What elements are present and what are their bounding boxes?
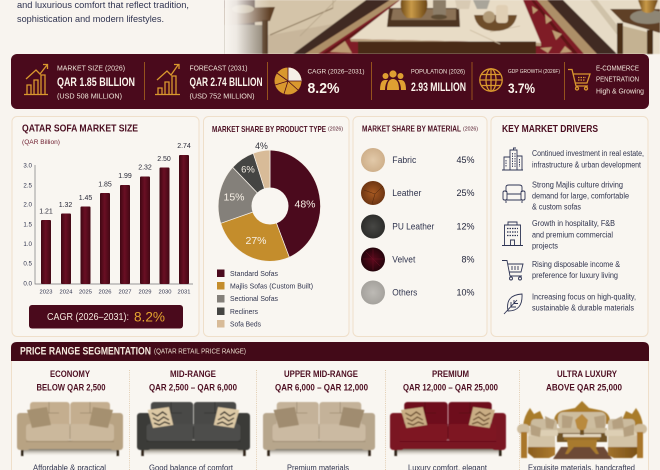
stat: forecast — [155, 64, 262, 100]
header band: PRICE RANGE SEGMENTATION — [20, 346, 151, 358]
legend: Standard Sofas — [230, 269, 278, 278]
material: velvet — [361, 248, 474, 272]
bar chart: 2.50 — [157, 156, 171, 163]
heading: (2026) — [463, 126, 478, 132]
stat: e-commerce: High & Growing — [596, 86, 644, 96]
bar chart: 0.0 — [23, 280, 33, 288]
driver: disposable income: preference for luxury living — [532, 271, 618, 280]
legend: Majlis Sofas (Custom Built) — [230, 282, 313, 290]
material: fabric: Fabric — [392, 155, 417, 165]
tier: economy: BELOW QAR 2,500 — [36, 382, 106, 392]
legend: Sofa Beds — [230, 320, 261, 328]
legend: Sectional Sofas — [230, 294, 278, 303]
stat: population: 2.93 MILLION — [411, 80, 466, 94]
bar chart: 1.21 — [39, 208, 53, 216]
bar chart: 2025 — [79, 290, 92, 296]
material: PU leather: 12% — [456, 222, 474, 232]
icon: people — [380, 70, 406, 90]
driver: sustainability: Increasing focus on high-quality, — [532, 292, 636, 302]
driver: sustainability: sustainable & durable materials — [532, 304, 634, 312]
material: PU leather — [361, 214, 474, 238]
callout: CAGR — [29, 305, 183, 328]
material: leather: 25% — [456, 188, 474, 198]
stat: GDP growth — [480, 69, 560, 96]
stat: CAGR: 8.2% — [308, 80, 340, 97]
tier: ultra luxury: ABOVE QAR 25,000 — [546, 382, 622, 392]
icon: city — [502, 148, 523, 170]
tier: upper mid-range: UPPER MID-RANGE — [284, 369, 358, 379]
icon: bowl with candles — [474, 15, 517, 31]
icon: left sofa — [255, 0, 366, 54]
panel: market share by product type — [204, 116, 349, 336]
bar chart: 1.99 — [118, 173, 132, 180]
bar chart: 3.0 — [23, 162, 33, 170]
heading: KEY MARKET DRIVERS — [502, 123, 598, 135]
icon: cart — [502, 260, 523, 280]
icon: pie chart — [274, 68, 302, 94]
stat: forecast: FORECAST (2031) — [190, 64, 248, 72]
material: others: 10% — [456, 288, 474, 298]
tier: premium: PREMIUM — [432, 369, 469, 379]
icon: right side table — [610, 9, 660, 33]
bar chart: 2.32 — [138, 164, 152, 172]
callout: CAGR: 8.2% — [134, 308, 165, 324]
stat: population — [380, 68, 466, 94]
icon: globe — [480, 69, 502, 91]
tier: mid-range: QAR 2,500 – QAR 6,000 — [149, 382, 237, 392]
driver: hospitality — [502, 219, 615, 250]
stat: GDP growth: 3.7% — [508, 80, 535, 96]
panel: key market drivers — [491, 116, 648, 336]
intro text: and luxurious comfort that reflect tradition, — [17, 0, 189, 10]
panel: key stats bar — [11, 54, 649, 109]
donut chart: 48% — [294, 198, 316, 210]
tier: ultra luxury: ULTRA LUXURY — [557, 369, 617, 379]
heading: MARKET SHARE BY PRODUCT TYPE — [212, 124, 326, 134]
stat: e-commerce: E-COMMERCE — [596, 64, 639, 72]
material: leather — [361, 181, 474, 205]
tier: economy — [17, 369, 123, 470]
heading: QATAR SOFA MARKET SIZE — [22, 124, 138, 134]
bar chart: 1.45 — [79, 195, 92, 202]
stat: e-commerce — [568, 64, 644, 96]
donut chart: 4% — [255, 141, 268, 151]
material: others: Others — [392, 288, 418, 298]
material: velvet: 8% — [461, 254, 474, 264]
stat: forecast: QAR 2.74 BILLION — [190, 75, 262, 89]
bar chart: 2029 — [139, 290, 151, 296]
panel: price range segmentation — [11, 342, 649, 470]
donut chart: 15% — [223, 192, 245, 204]
driver: hospitality: Growth in hospitality, F&B — [532, 219, 615, 228]
icon: beige sofa — [17, 402, 123, 456]
bar chart: 2026 — [99, 290, 111, 296]
hero photo: living room with sofas and marble table — [225, 0, 660, 54]
stat: market size: MARKET SIZE (2026) — [57, 64, 125, 72]
icon: building — [502, 222, 523, 246]
tier: premium: QAR 12,000 – QAR 25,000 — [403, 382, 498, 392]
material: fabric: 45% — [456, 155, 474, 165]
material: fabric — [361, 148, 474, 172]
icon: ornate gold sofa set — [517, 401, 647, 459]
bar chart: 1.0 — [23, 241, 33, 248]
icon: left side table — [225, 7, 275, 25]
icon: cart — [568, 70, 590, 90]
driver: real estate: Continued investment in real estate, — [532, 149, 644, 158]
icon: charcoal sofa — [137, 402, 250, 456]
bar chart: 2023 — [40, 290, 52, 296]
driver: disposable income: Rising disposable income & — [532, 260, 621, 269]
icon: marble table — [350, 0, 541, 43]
bar chart: 1.5 — [23, 222, 33, 228]
donut chart — [218, 141, 320, 261]
header band — [11, 342, 649, 361]
icon: burgundy sofa — [390, 402, 506, 456]
stat: market size: (USD 508 MILLION) — [57, 92, 122, 100]
stat: market size: QAR 1.85 BILLION — [57, 75, 135, 89]
bar chart — [23, 143, 193, 296]
driver: Majlis culture — [503, 180, 629, 212]
material: others — [361, 280, 474, 304]
icon: carpet — [305, 0, 597, 54]
tier: upper mid-range — [263, 369, 375, 470]
driver: real estate: infrastructure & urban development — [532, 160, 642, 170]
material: velvet: Velvet — [392, 254, 416, 264]
bar chart: 2030 — [159, 290, 171, 296]
stat: CAGR: CAGR (2026–2031) — [308, 68, 364, 76]
tier: economy: ECONOMY — [50, 369, 90, 379]
donut chart: 27% — [245, 235, 267, 247]
legend — [217, 269, 313, 328]
bar chart: 2.5 — [23, 182, 33, 190]
tier: mid-range — [137, 369, 250, 470]
stat: GDP growth: GDP GROWTH (2026F) — [508, 69, 560, 75]
donut chart: 6% — [241, 164, 255, 176]
driver: Majlis culture: demand for large, comfortable — [532, 192, 629, 200]
heading: MARKET SHARE BY MATERIAL — [362, 124, 461, 134]
legend: Recliners — [230, 307, 258, 316]
unit label: (QAR Billion) — [22, 139, 60, 146]
stat: population: POPULATION (2026) — [411, 68, 465, 76]
driver: Majlis culture: & custom sofas — [532, 202, 581, 212]
icon: sofa — [503, 185, 525, 203]
icon: taupe sofa — [263, 402, 375, 456]
bar chart: 2024 — [60, 290, 73, 296]
stat: e-commerce: PENETRATION — [596, 74, 639, 84]
bar chart: 1.85 — [98, 182, 112, 188]
icon: growth chart — [24, 64, 48, 94]
tier: mid-range: MID-RANGE — [170, 369, 216, 379]
icon: leaf — [504, 294, 522, 314]
intro text — [17, 0, 189, 24]
stat: forecast: (USD 752 MILLION) — [190, 92, 254, 100]
stat: market size — [24, 64, 135, 100]
bar chart: 2031 — [178, 290, 190, 296]
icon: growth chart — [155, 64, 180, 94]
tier: ultra luxury — [517, 369, 647, 470]
header band: (QATAR RETAIL PRICE RANGE) — [154, 348, 246, 356]
callout: CAGR: CAGR (2026–2031): — [47, 311, 129, 323]
bar chart: 2027 — [119, 290, 131, 296]
stat: CAGR — [274, 68, 364, 97]
tier: upper mid-range: QAR 6,000 – QAR 12,000 — [275, 382, 368, 392]
driver: hospitality: projects — [532, 242, 558, 250]
driver: hospitality: and premium commercial — [532, 230, 613, 240]
icon: tray with brass vase — [387, 8, 460, 27]
bar chart: 0.5 — [23, 260, 33, 268]
bar chart: 2.74 — [177, 143, 191, 150]
intro text: sophistication and modern lifestyles. — [17, 14, 164, 24]
material: leather: Leather — [392, 188, 421, 198]
icon: right sofa — [563, 0, 660, 54]
material: PU leather: PU Leather — [392, 222, 434, 232]
driver: Majlis culture: Strong Majlis culture driving — [532, 180, 623, 190]
bar chart: 2.0 — [23, 202, 33, 208]
driver: sustainability — [504, 292, 636, 314]
bar chart: 1.32 — [59, 202, 72, 209]
driver: real estate — [502, 148, 644, 170]
panel: market share by material — [353, 116, 487, 336]
driver: disposable income — [502, 260, 621, 280]
panel: Qatar sofa market size — [12, 116, 199, 336]
heading: (2026) — [328, 126, 343, 132]
tier: premium — [390, 369, 506, 470]
